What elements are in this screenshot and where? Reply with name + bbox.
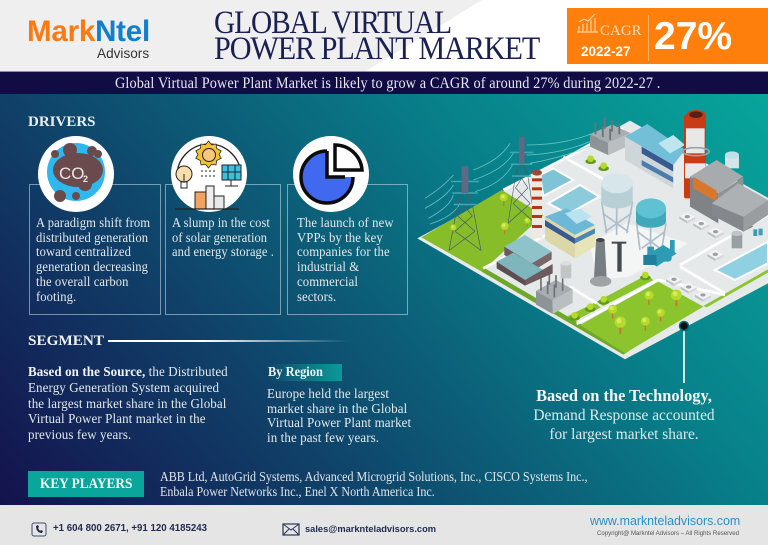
driver 1 text: A paradigm shift from (36, 215, 150, 230)
chimney small (532, 170, 542, 238)
CAGR value: 27% (654, 15, 732, 58)
driver 1 text: toward centralized (36, 244, 131, 259)
segment heading: SEGMENT (28, 332, 104, 349)
driver 3 text: industrial & (297, 259, 359, 274)
plate ground (420, 121, 768, 355)
transformer near (536, 272, 573, 314)
text: based on the technology: Based on the Technology, (536, 386, 712, 405)
main gradient panel (0, 94, 768, 505)
driver 3 text: commercial (297, 274, 358, 289)
warehouse (497, 235, 553, 286)
driver 2 text (172, 215, 274, 259)
CAGR period: 2022-27 (581, 44, 631, 59)
leader line with dot (680, 322, 688, 383)
water tower white (601, 173, 633, 235)
plate base (417, 123, 768, 359)
pools (540, 168, 768, 280)
header grey diagonal panel (0, 0, 482, 71)
text: based on the source: previous few years. (28, 427, 131, 442)
small tank (725, 151, 739, 168)
AC units back (679, 212, 724, 261)
driver 3 text (297, 215, 394, 304)
icon: growth chart (577, 14, 598, 33)
logo subline: Advisors (97, 46, 149, 61)
key players list: Enbala Power Networks Inc., Enel X North America Inc. (160, 484, 435, 499)
text: based on the technology: Demand Response accounted (533, 407, 715, 424)
trees (450, 155, 682, 334)
AC units front (666, 275, 711, 302)
website: www.marknteladvisors.com (590, 513, 740, 528)
text: region detail (267, 386, 412, 445)
roads (483, 128, 768, 324)
driver 1 box (29, 184, 161, 315)
email: sales@marknteladvisors.com (305, 524, 436, 534)
icon: mail (282, 523, 300, 536)
text: based on the technology: for largest market share. (549, 426, 699, 443)
pylon near (449, 166, 481, 250)
text: based on the source: Energy Generation System acquired (28, 380, 219, 395)
panel: driver 3 (287, 136, 408, 315)
key players list (160, 469, 588, 499)
driver 1 text: distributed generation (36, 230, 148, 245)
panel: driver 1 (29, 136, 161, 315)
icon: CO2 cloud (38, 136, 114, 212)
text: region detail: market share in the Global (267, 401, 407, 416)
subtitle text: Global Virtual Power Plant Market is likely to grow a CAGR of around 27% during 2022-27 . (115, 75, 660, 92)
driver 2 text: of solar generation (172, 230, 267, 245)
driver 2 box (165, 184, 281, 315)
phone numbers: +1 604 800 2671, +91 120 4185243 (53, 523, 207, 534)
footer (0, 505, 768, 545)
wires (425, 132, 597, 224)
CAGR label: CAGR (600, 23, 642, 39)
transformer far (590, 117, 630, 155)
title (214, 5, 540, 67)
driver 1 text: footing. (36, 289, 76, 304)
logo (27, 15, 150, 61)
title: POWER PLANT MARKET (214, 31, 539, 67)
teal machinery (643, 240, 677, 267)
drivers heading: DRIVERS (28, 114, 96, 130)
header band (0, 0, 768, 71)
driver 2 text: and energy storage . (172, 244, 274, 259)
silos and stack (561, 238, 626, 287)
panel: driver 2 (165, 136, 281, 315)
by region text: By Region (268, 364, 323, 379)
text: region detail: Europe held the largest (267, 386, 389, 401)
icon: pie chart (293, 136, 369, 212)
CAGR badge (567, 8, 768, 64)
text: region detail: Virtual Power Plant market (267, 415, 411, 430)
icon: phone (32, 522, 46, 536)
driver 3 text: The launch of new (297, 215, 394, 230)
badge divider (648, 15, 649, 61)
key players label (28, 471, 144, 497)
subtitle band (0, 71, 768, 94)
copyright: Copyright@ Markntel Advisors – All Rights Reserved (597, 530, 739, 537)
driver 3 text: VPPs by the key (297, 230, 383, 245)
water tower teal (636, 198, 666, 252)
text: based on the technology (533, 386, 715, 443)
driver 3 text: companies for the (297, 244, 390, 259)
lawn front edge (482, 268, 628, 355)
driver 1 text (36, 215, 150, 304)
lawn left (421, 190, 543, 272)
key players text: KEY PLAYERS (40, 476, 132, 492)
icon: CO2 cloud: 2 (83, 174, 88, 184)
driver 1 text: generation decreasing (36, 259, 148, 274)
building: central (545, 208, 595, 258)
text: region detail: in the past few years. (267, 430, 379, 445)
lawn front (580, 282, 703, 353)
grey tank (732, 229, 763, 248)
chimney tall (683, 110, 709, 198)
driver 3 text: sectors. (297, 289, 336, 304)
driver 2 text: A slump in the cost (172, 215, 270, 230)
text: based on the source: the largest market share in the Global (28, 396, 226, 411)
text: based on the source: Virtual Power Plant market in the (28, 411, 206, 426)
segment rule (108, 340, 348, 342)
building: right grey (690, 160, 768, 232)
logo wordmark: MarkNtel (27, 15, 150, 48)
text: based on the source: Based on the Source, the Distributed (28, 364, 228, 379)
pylon far (508, 137, 535, 223)
title: GLOBAL VIRTUAL (214, 5, 451, 41)
by region label (267, 364, 342, 381)
text: based on the source (28, 364, 228, 442)
lawn strips (567, 269, 768, 320)
icon: solar energy (171, 136, 247, 212)
icon: CO2 cloud: CO (59, 164, 84, 183)
key players list: ABB Ltd, AutoGrid Systems, Advanced Microgrid Solutions, Inc., CISCO Systems Inc., (160, 469, 588, 484)
driver 1 text: the overall carbon (36, 274, 129, 289)
driver 3 box (287, 184, 408, 315)
building: top centre (625, 124, 685, 188)
